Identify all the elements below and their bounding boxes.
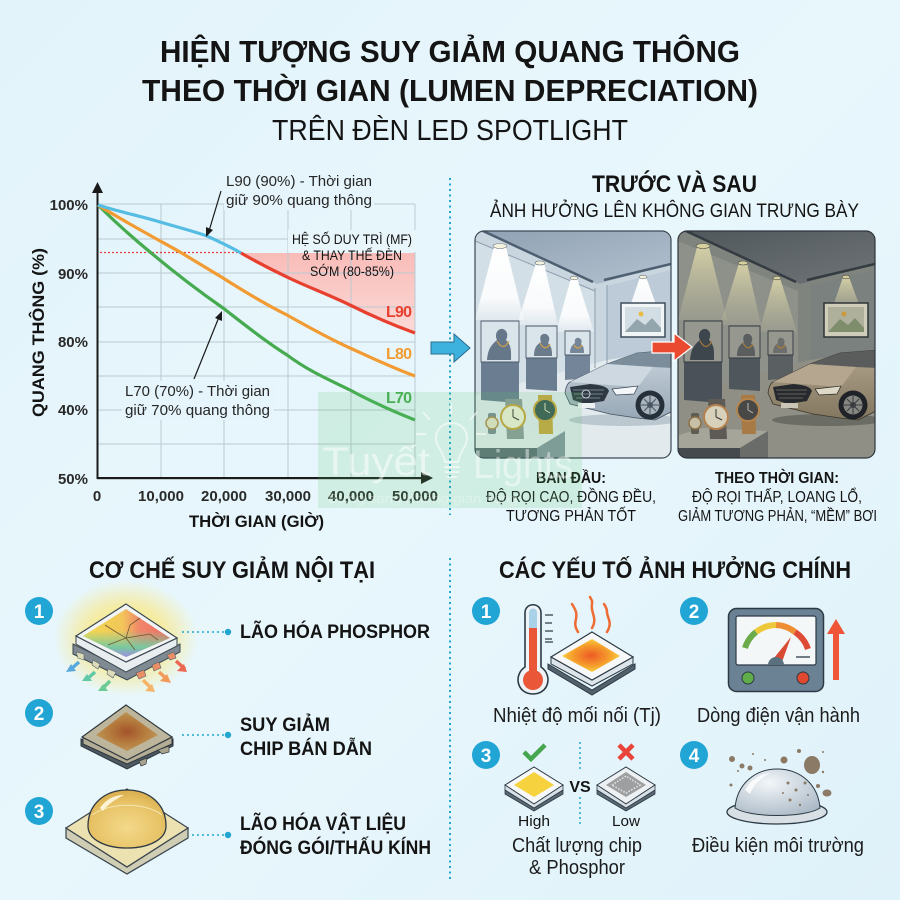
factor 3: chip quality xyxy=(472,741,655,879)
watches on shelf xyxy=(475,395,565,458)
x axis labels: 50,000 xyxy=(392,488,438,505)
watermark bulb xyxy=(416,403,486,477)
caption: after xyxy=(678,469,877,525)
watermark: Bừng sáng Không gian sống xyxy=(328,491,518,506)
caption: before xyxy=(486,470,656,525)
badge 3 xyxy=(25,797,53,825)
dim framed picture xyxy=(824,303,868,337)
y axis labels: 100% xyxy=(50,197,88,214)
curve labels: L90 xyxy=(386,304,412,321)
label xyxy=(512,835,642,879)
y axis labels: 80% xyxy=(58,334,88,351)
heading: before and after: ẢNH HƯỞNG LÊN KHÔNG GIAN TRƯNG BÀY xyxy=(490,200,859,222)
y axis labels: 40% xyxy=(58,402,88,419)
dull watches on shelf xyxy=(678,395,768,458)
badge xyxy=(472,597,500,625)
heading: main factors: CÁC YẾU TỐ ẢNH HƯỞNG CHÍNH xyxy=(499,555,851,584)
mechanism 2: semiconductor chip decay xyxy=(25,699,372,769)
watermark xyxy=(318,392,582,508)
heading: before and after xyxy=(490,170,859,222)
annotation L70: giữ 70% quang thông xyxy=(125,402,270,419)
connector 2 xyxy=(182,732,231,738)
badge xyxy=(680,597,708,625)
arrow: before to after xyxy=(652,333,692,361)
dull car xyxy=(768,350,884,426)
y axis labels: 50% xyxy=(58,471,88,488)
curve L70 xyxy=(98,205,415,420)
connector 3 xyxy=(192,832,231,838)
heading: before and after: TRƯỚC VÀ SAU xyxy=(592,170,757,198)
badge 1: 1 xyxy=(34,602,45,623)
y axis title: QUANG THÔNG (%) xyxy=(29,248,48,417)
curve labels: L80 xyxy=(386,346,412,363)
y axis labels: 90% xyxy=(58,266,88,283)
factor 4: environment xyxy=(680,741,864,857)
annotation L90: giữ 90% quang thông xyxy=(226,192,372,209)
title: HIỆN TƯỢNG SUY GIẢM QUANG THÔNG xyxy=(160,33,740,69)
frame: after panel xyxy=(678,231,875,458)
label 3: LÃO HÓA VẬT LIỆU xyxy=(240,813,406,835)
label: Chất lượng chip xyxy=(512,835,642,857)
icon: check xyxy=(524,745,545,759)
icon: cracked phosphor chip xyxy=(54,580,198,696)
x axis labels xyxy=(93,488,438,505)
badge: 3 xyxy=(481,746,491,767)
vertical dotted dividers xyxy=(449,178,451,880)
title: THEO THỜI GIAN (LUMEN DEPRECIATION) xyxy=(142,72,758,108)
curve labels: L70 xyxy=(386,390,412,407)
heading: intrinsic mechanisms: CƠ CHẾ SUY GIẢM NỘI TẠI xyxy=(89,555,375,584)
caption: before: TƯƠNG PHẢN TỐT xyxy=(506,507,636,525)
arrow: chart to photos xyxy=(431,334,470,362)
x axis labels: 0 xyxy=(93,488,101,505)
label 2: SUY GIẢM xyxy=(240,714,330,736)
framed picture xyxy=(621,303,665,337)
red maintenance zone xyxy=(241,253,415,333)
label 2: CHIP BÁN DẪN xyxy=(240,738,372,760)
chart: lumen depreciation xyxy=(29,172,438,531)
x axis labels: 20,000 xyxy=(201,488,247,505)
icon: hot chip with flames xyxy=(548,597,635,695)
icon: yellowed dome lens xyxy=(66,789,188,874)
annotation L90 xyxy=(206,172,374,237)
x axis title: THỜI GIAN (GIỜ) xyxy=(189,512,324,531)
annotation L70: L70 (70%) - Thời gian xyxy=(125,383,270,400)
label 1: LÃO HÓA PHOSPHOR xyxy=(240,621,430,643)
annotation MF xyxy=(288,230,416,279)
icon: analog meter xyxy=(728,608,824,692)
caption: before: ĐỘ RỌI CAO, ĐỒNG ĐỀU, xyxy=(486,488,656,506)
y axis labels xyxy=(50,197,88,488)
car xyxy=(564,352,670,426)
factor 2: drive current xyxy=(680,597,860,727)
title xyxy=(142,33,758,147)
vs separator: VS xyxy=(569,779,591,796)
annotation MF: SỚM (80-85%) xyxy=(310,264,394,279)
caption: before: BAN ĐẦU: xyxy=(536,470,606,487)
connector 1 xyxy=(182,629,231,635)
label 3 xyxy=(240,813,431,859)
badge 2 xyxy=(25,699,53,727)
caption: after: THEO THỜI GIAN: xyxy=(715,469,839,487)
icon: low quality chip xyxy=(597,767,655,811)
badge 1 xyxy=(25,597,53,625)
label: Dòng điện vận hành xyxy=(697,705,860,727)
label: Nhiệt độ mối nối (Tj) xyxy=(493,705,661,727)
badge: 2 xyxy=(689,602,699,623)
spotlight beams xyxy=(475,247,661,332)
badge 2: 2 xyxy=(34,704,44,725)
axes xyxy=(92,182,433,484)
label: & Phosphor xyxy=(529,857,625,879)
badge: 4 xyxy=(689,746,700,767)
annotation L90: L90 (90%) - Thời gian xyxy=(226,173,372,190)
watermark: Lights xyxy=(473,443,573,487)
dim spotlight beams xyxy=(678,247,864,332)
icon: dusty dome xyxy=(727,749,832,824)
badge xyxy=(680,741,708,769)
label: Điều kiện môi trường xyxy=(692,835,864,857)
vs separator xyxy=(569,742,591,827)
badge xyxy=(472,741,500,769)
mechanism 1: phosphor aging xyxy=(25,580,430,696)
x axis labels: 30,000 xyxy=(265,488,311,505)
mechanism 3: lens aging xyxy=(25,789,431,874)
icon: degraded chip xyxy=(81,705,173,769)
high label: High xyxy=(518,813,550,830)
title: TRÊN ĐÈN LED SPOTLIGHT xyxy=(272,114,628,147)
badge: 1 xyxy=(481,602,492,623)
x axis labels: 40,000 xyxy=(328,488,374,505)
MF threshold line xyxy=(100,252,241,254)
icon: high quality chip xyxy=(505,767,563,811)
badge 3: 3 xyxy=(34,802,44,823)
label 3: ĐÓNG GÓI/THẤU KÍNH xyxy=(240,837,431,859)
icon: cross xyxy=(619,745,633,759)
curve L90 upper xyxy=(98,205,241,253)
curve L80 xyxy=(98,205,415,376)
icon: thermometer xyxy=(518,605,553,694)
panel: after showroom xyxy=(678,231,884,458)
frame: before panel xyxy=(475,231,671,458)
factor 1: junction temperature xyxy=(472,597,661,727)
annotation MF: & THAY THẾ ĐÈN xyxy=(302,248,402,263)
panel: before showroom xyxy=(475,231,681,458)
display cases xyxy=(481,321,590,403)
low label: Low xyxy=(612,813,640,830)
annotation MF: HỆ SỐ DUY TRÌ (MF) xyxy=(292,232,412,247)
curve L90 lower xyxy=(241,253,415,333)
label 2 xyxy=(240,714,372,760)
curve labels xyxy=(386,304,412,407)
annotation L70 xyxy=(122,311,274,420)
watermark: Tuyết xyxy=(322,440,430,484)
x axis labels: 10,000 xyxy=(138,488,184,505)
caption: after: ĐỘ RỌI THẤP, LOANG LỔ, xyxy=(692,488,862,506)
icon: red up arrow xyxy=(827,619,845,680)
dim display cases xyxy=(684,321,793,403)
